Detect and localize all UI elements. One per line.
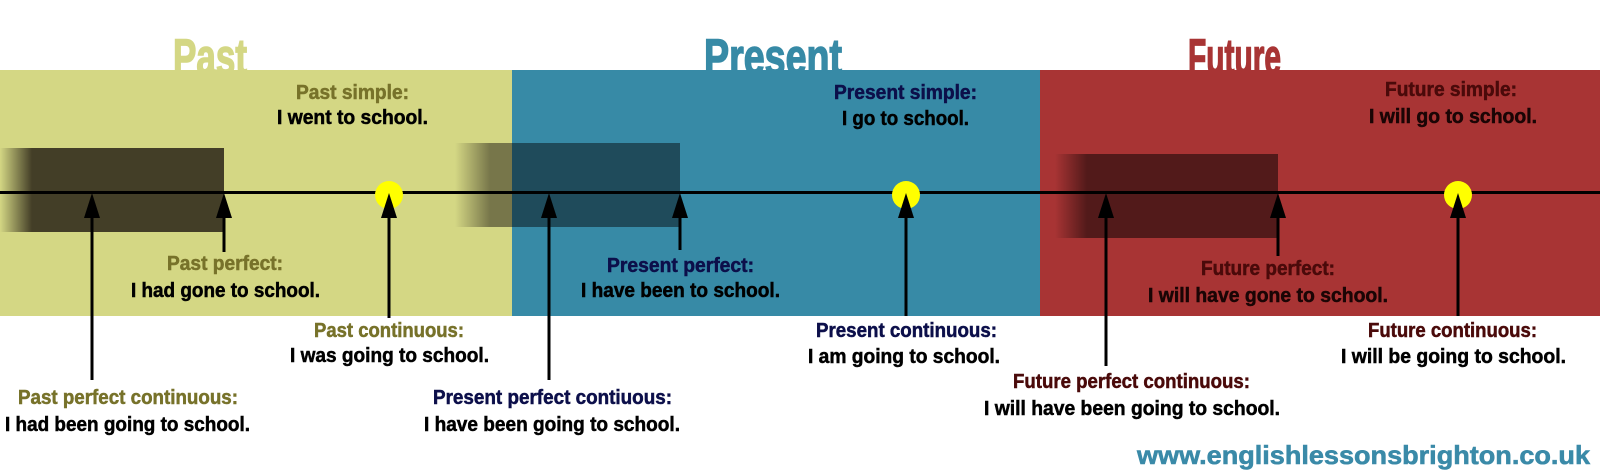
- labels: past: [5, 82, 489, 436]
- labels: past: Past perfect:: [167, 253, 283, 275]
- labels: future: [984, 79, 1566, 420]
- labels: present: I go to school.: [842, 108, 969, 130]
- timeline: [0, 191, 1600, 194]
- labels: past: Past perfect continuous:: [18, 387, 238, 409]
- title: Future: Future: [1188, 29, 1281, 85]
- labels: past: I was going to school.: [290, 345, 489, 367]
- panel: present: [512, 70, 1040, 316]
- panel: past: [0, 70, 512, 316]
- labels: present: Present simple:: [834, 82, 977, 104]
- labels: future: I will go to school.: [1369, 106, 1537, 128]
- labels: past: I had been going to school.: [5, 414, 250, 436]
- labels: past: Past continuous:: [314, 320, 464, 342]
- labels: present: Present continuous:: [816, 320, 997, 342]
- labels: present: [424, 82, 1000, 436]
- labels: present: I have been to school.: [581, 280, 780, 302]
- labels: future: I will have gone to school.: [1148, 285, 1388, 307]
- labels: past: I went to school.: [277, 107, 428, 129]
- labels: future: Future perfect continuous:: [1013, 371, 1250, 393]
- labels: past: Past simple:: [296, 82, 409, 104]
- labels: present: I have been going to school.: [424, 414, 680, 436]
- block: present perfect duration: [455, 143, 680, 227]
- title: Present: Present: [704, 29, 842, 85]
- title: Past: Past: [173, 29, 247, 85]
- labels: present: I am going to school.: [808, 346, 1000, 368]
- arrows: [84, 193, 1466, 380]
- yellow dots: [375, 181, 1472, 209]
- labels: past: I had gone to school.: [131, 280, 320, 302]
- labels: present: Present perfect contiuous:: [433, 387, 672, 409]
- labels: future: I will be going to school.: [1341, 346, 1566, 368]
- labels: future: Future perfect:: [1201, 258, 1335, 280]
- website url: www.englishlessonsbrighton.co.uk: [1136, 440, 1591, 470]
- block: past perfect continuous duration: [0, 148, 224, 232]
- labels: future: Future simple:: [1385, 79, 1517, 101]
- labels: future: Future continuous:: [1368, 320, 1537, 342]
- panel: future: [1040, 70, 1600, 316]
- labels: present: Present perfect:: [607, 255, 754, 277]
- labels: future: I will have been going to school.: [984, 398, 1280, 420]
- block: future perfect duration: [1055, 154, 1278, 238]
